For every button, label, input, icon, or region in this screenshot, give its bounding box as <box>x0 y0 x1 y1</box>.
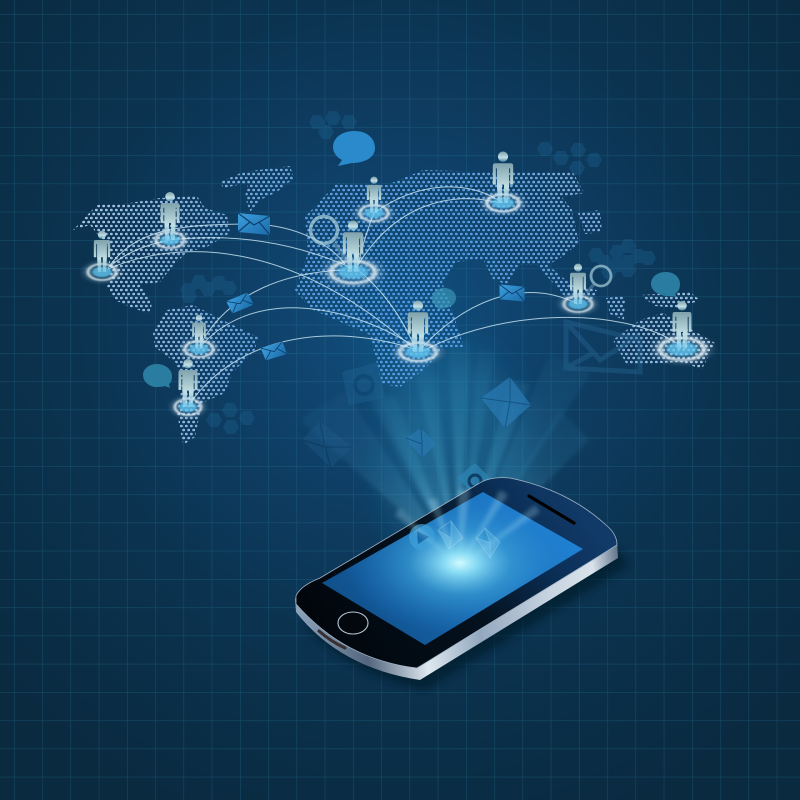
speech bubble: africa <box>432 288 456 310</box>
speech bubbles <box>143 131 680 388</box>
hexagon clusters <box>180 111 656 434</box>
node: africa <box>398 300 438 362</box>
connection arcs <box>108 187 680 403</box>
speech bubble: south america <box>143 364 172 388</box>
screen glow <box>360 506 549 625</box>
faded envelope: left <box>302 421 352 468</box>
faded large icons <box>302 322 640 496</box>
faded camera <box>342 362 385 405</box>
magnifiers <box>310 216 611 293</box>
envelope icon right <box>476 528 500 558</box>
magnifier: asia <box>587 266 611 293</box>
node: europe large <box>328 220 378 284</box>
phone shadow <box>305 530 630 690</box>
node: australia <box>657 301 707 361</box>
light rays from phone <box>300 300 590 565</box>
play icon <box>409 524 435 550</box>
envelopes on arcs <box>226 213 524 362</box>
envelope: atlantic north <box>238 213 270 235</box>
node: south america south <box>173 359 203 416</box>
bright rays above screen <box>395 490 540 562</box>
speech bubble: top <box>333 131 375 166</box>
node: north america <box>154 192 186 249</box>
envelope: atlantic middle <box>226 291 254 315</box>
phone side edge <box>295 540 618 680</box>
node: far west <box>86 231 118 281</box>
speech bubble: australia <box>651 272 680 297</box>
network nodes: ring and person <box>86 151 707 416</box>
node: south america north <box>183 315 215 358</box>
bottom speaker <box>319 631 345 648</box>
icons emerging from screen <box>409 521 500 558</box>
envelope: small rising <box>406 428 436 458</box>
smartphone <box>295 470 630 690</box>
envelope: indian ocean <box>500 284 524 302</box>
camera rising near phone <box>457 463 494 496</box>
phone screen <box>322 492 583 645</box>
phone face <box>296 478 617 668</box>
envelope: middle rising <box>481 377 531 428</box>
top speaker <box>529 496 574 523</box>
faded envelope: right <box>566 322 640 372</box>
dotted world map <box>73 166 715 445</box>
home button <box>338 612 368 634</box>
magnifier: europe <box>310 216 350 263</box>
node: north europe <box>358 177 390 222</box>
node: south east asia <box>562 264 594 313</box>
envelope icon left <box>438 521 463 549</box>
node: asia <box>485 151 521 213</box>
envelope: atlantic south <box>261 340 287 362</box>
